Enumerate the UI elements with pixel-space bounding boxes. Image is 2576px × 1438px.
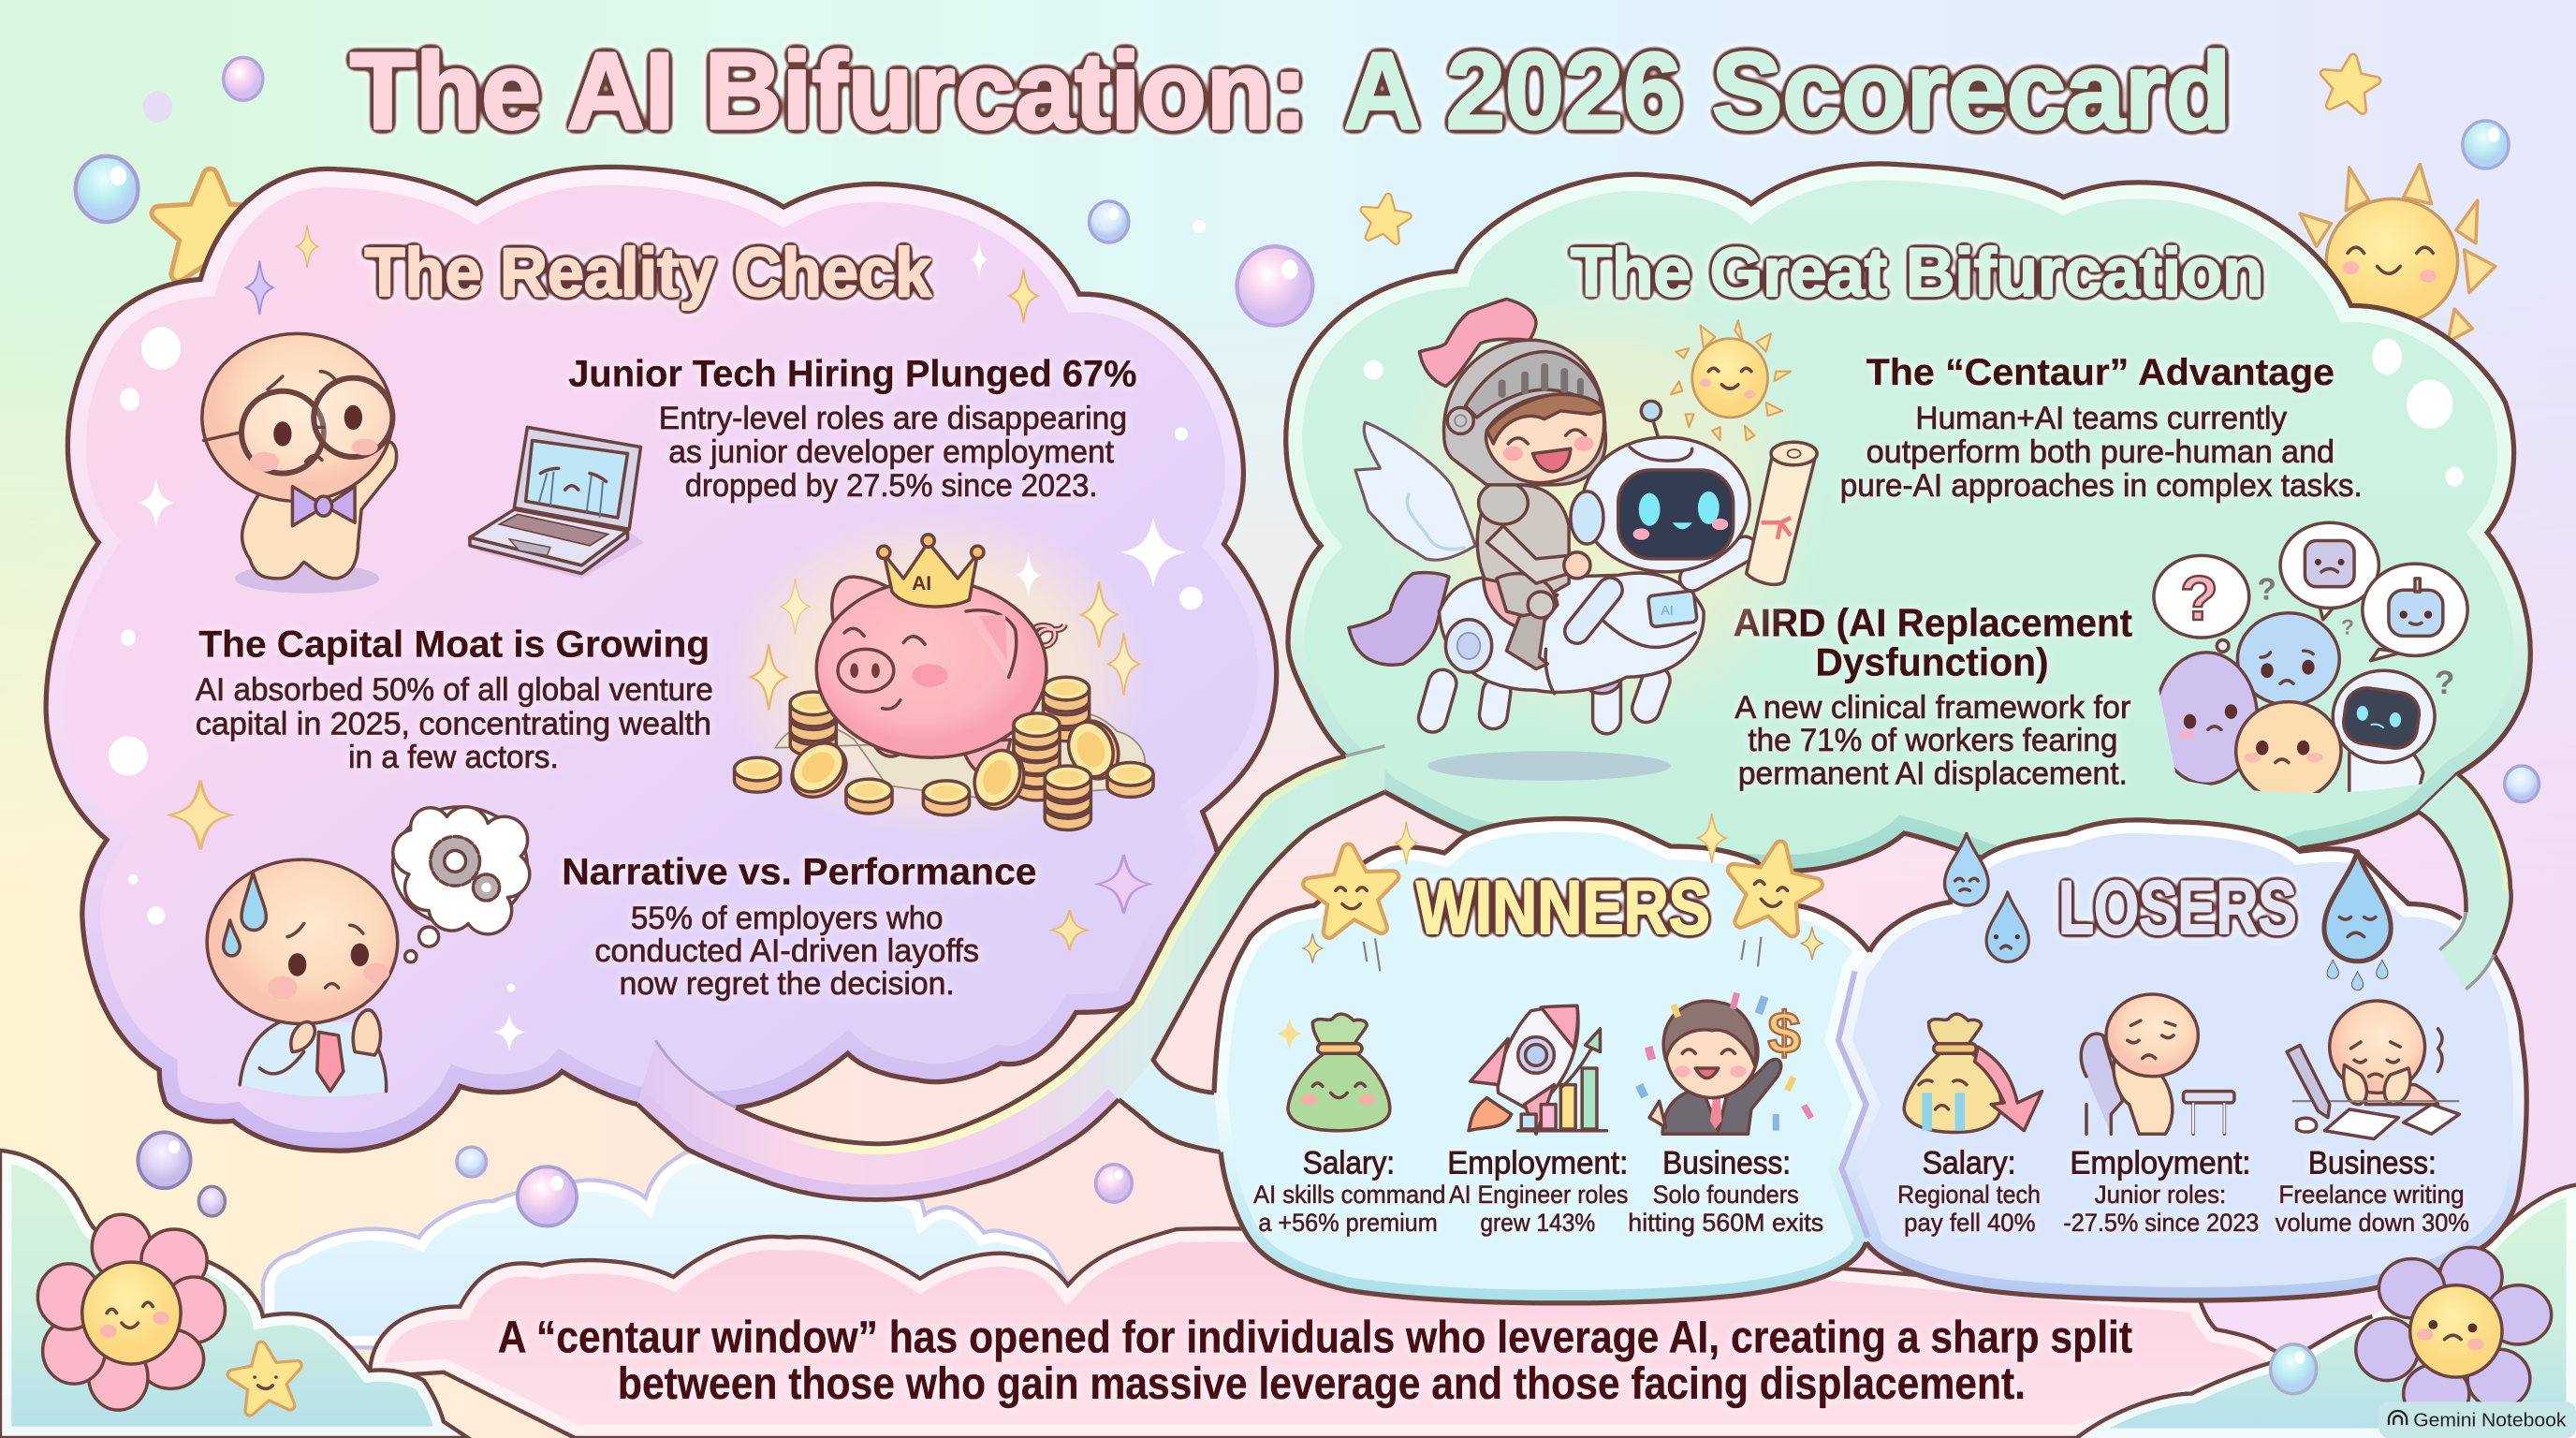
icon: crying laptop [470, 427, 644, 579]
panel: winners [1214, 814, 1869, 1303]
text: AIRD: permanent AI displacement. [1738, 756, 2128, 791]
winners: business [1628, 1145, 1823, 1237]
text: junior tech hiring [568, 354, 1137, 504]
text: capital moat: capital in 2025, concentrating wealth [196, 707, 711, 742]
losers heading: LOSERS [2058, 866, 2297, 950]
watermark: Gemini Notebook [2413, 1411, 2567, 1431]
knight torso and leg [1477, 485, 1569, 611]
icon: small star [229, 1342, 302, 1413]
winners: employment: AI Engineer roles [1449, 1180, 1628, 1209]
face [1486, 394, 1604, 483]
watermark [2378, 1401, 2576, 1438]
text: centaur advantage: outperform both pure-human and [1866, 434, 2334, 470]
panel: the reality check [46, 167, 1277, 1151]
text: narrative vs performance: Narrative vs. Performance [562, 851, 1036, 892]
icon: winner stars and sparkles [1303, 814, 1822, 971]
losers: salary: pay fell 40% [1904, 1208, 2036, 1237]
icon: glasses character [202, 333, 397, 594]
helmet [1444, 340, 1605, 485]
text: capital moat [196, 624, 713, 775]
text: narrative vs performance [562, 851, 1036, 1002]
white dots [109, 327, 1203, 991]
losers: employment: Employment: [2070, 1145, 2250, 1181]
winners: salary: a +56% premium [1258, 1208, 1438, 1237]
losers: business: Business: [2308, 1145, 2437, 1181]
losers: employment: Junior roles: [2095, 1180, 2226, 1209]
sparkles [138, 225, 1186, 1050]
robot chest tag [1647, 591, 1697, 627]
robot legs [1432, 661, 1656, 720]
losers: salary: Regional tech [1897, 1180, 2041, 1209]
icon: smiling money bag [1277, 1014, 1390, 1131]
rainbow band connector [637, 746, 1385, 1199]
background cloud [263, 1151, 1068, 1347]
robot arm [1692, 549, 1745, 579]
right hill [2076, 1185, 2576, 1438]
winners: business: Solo founders [1653, 1180, 1799, 1209]
text: narrative vs performance: 55% of employers who [631, 901, 943, 936]
icon: anxious workers group: ? [2180, 565, 2218, 634]
text: junior tech hiring: dropped by 27.5% since 2023. [685, 468, 1097, 504]
panel: losers [1838, 820, 2526, 1300]
winners: employment [1447, 1145, 1628, 1237]
icon: sad money bag with falling arrow [1904, 1014, 2042, 1132]
icon: sad person on chair [2081, 994, 2234, 1134]
thought bubble [392, 807, 530, 962]
title: The AI Bifurcation: [350, 30, 1308, 152]
text: capital moat: AI absorbed 50% of all global venture [196, 672, 713, 708]
icon: anxious workers group: ? [2258, 573, 2276, 608]
losers: salary: Salary: [1922, 1145, 2016, 1181]
winners: employment: grew 143% [1480, 1208, 1595, 1237]
wing [1355, 422, 1475, 560]
icon: worried character with gears [207, 807, 530, 1096]
text: junior tech hiring: as junior developer employment [668, 434, 1114, 470]
icon: knight riding robot centaur [1349, 279, 1823, 781]
text: AIRD: the 71% of workers fearing [1748, 723, 2117, 758]
heading: the great bifurcation: The Great Bifurcation [1571, 233, 2264, 311]
icon: anxious workers group: ? [2341, 615, 2354, 639]
icon: anxious workers group [2154, 522, 2467, 805]
winners: salary [1253, 1145, 1445, 1237]
decorative bubbles and stars behind panels [76, 54, 2539, 802]
tail [1349, 573, 1449, 665]
text: narrative vs performance: conducted AI-driven layoffs [594, 933, 979, 969]
text: AIRD: AIRD (AI Replacement [1734, 600, 2132, 644]
winners: salary: Salary: [1303, 1145, 1395, 1181]
text: centaur advantage: Human+AI teams currently [1915, 401, 2288, 436]
icon: sad writer with pen [2287, 1001, 2459, 1139]
icon: happy flower [37, 1214, 225, 1410]
text: centaur advantage: pure-AI approaches in complex tasks. [1840, 468, 2363, 504]
winners: employment: Employment: [1447, 1145, 1628, 1181]
small sun [1671, 320, 1791, 440]
text: junior tech hiring: Junior Tech Hiring Plunged 67% [568, 354, 1137, 395]
right mint band over losers [2419, 774, 2511, 990]
heading: the reality check: The Reality Check [365, 233, 932, 311]
title: A 2026 Scorecard [1344, 30, 2231, 152]
icon: anxious workers group: ? [2435, 665, 2454, 701]
icon: rocket and growth chart [1469, 1005, 1606, 1134]
losers: employment [2063, 1145, 2259, 1237]
losers: business [2276, 1145, 2469, 1237]
winners heading: WINNERS [1416, 866, 1710, 950]
icon: smiling sun [2300, 165, 2496, 342]
icon: sad flower [2356, 1247, 2552, 1423]
plume [1419, 299, 1536, 387]
icon: piggy bank with AI crown and coins: AI [912, 573, 931, 594]
panel: bottom banner [370, 1228, 2300, 1438]
banner text [498, 1313, 2132, 1409]
banner text: between those who gain massive leverage and those facing displacement. [618, 1358, 2026, 1409]
losers: employment: -27.5% since 2023 [2063, 1208, 2259, 1237]
winners: business: hitting 560M exits [1628, 1208, 1823, 1237]
text: AIRD: A new clinical framework for [1734, 690, 2130, 726]
lower bubbles [138, 1132, 2317, 1394]
icon: celebrating founder: $ [1767, 1001, 1801, 1066]
lower right lavender patch [2200, 1273, 2398, 1357]
text: AIRD [1734, 600, 2132, 791]
robot head [1651, 414, 1658, 435]
text: AIRD: Dysfunction) [1815, 639, 2049, 683]
scroll [1747, 449, 1815, 584]
losers: business: volume down 30% [2276, 1208, 2469, 1237]
icon: celebrating founder [1635, 992, 1814, 1134]
title [350, 30, 2231, 152]
icon: sad drops [1945, 833, 2391, 990]
horse body [1439, 573, 1704, 692]
white dots [1364, 339, 2464, 487]
text: capital moat: The Capital Moat is Growing [198, 624, 710, 665]
robot chest tag: AI [1661, 603, 1674, 618]
text: centaur advantage: The “Centaur” Advantage [1866, 352, 2334, 393]
text: centaur advantage [1840, 352, 2363, 504]
winners: salary: AI skills command [1253, 1180, 1445, 1209]
text: capital moat: in a few actors. [348, 740, 559, 775]
text: junior tech hiring: Entry-level roles are disappearing [659, 401, 1127, 436]
left hill [0, 1151, 468, 1438]
panel: the great bifurcation [1286, 164, 2530, 871]
banner text: A “centaur window” has opened for individuals who leverage AI, creating a sharp split [498, 1313, 2132, 1363]
winners: business: Business: [1662, 1145, 1791, 1181]
text: narrative vs performance: now regret the decision. [620, 966, 955, 1002]
icon: piggy bank with AI crown and coins [723, 509, 1153, 838]
losers: business: Freelance writing [2278, 1180, 2465, 1209]
losers: salary [1897, 1145, 2041, 1237]
